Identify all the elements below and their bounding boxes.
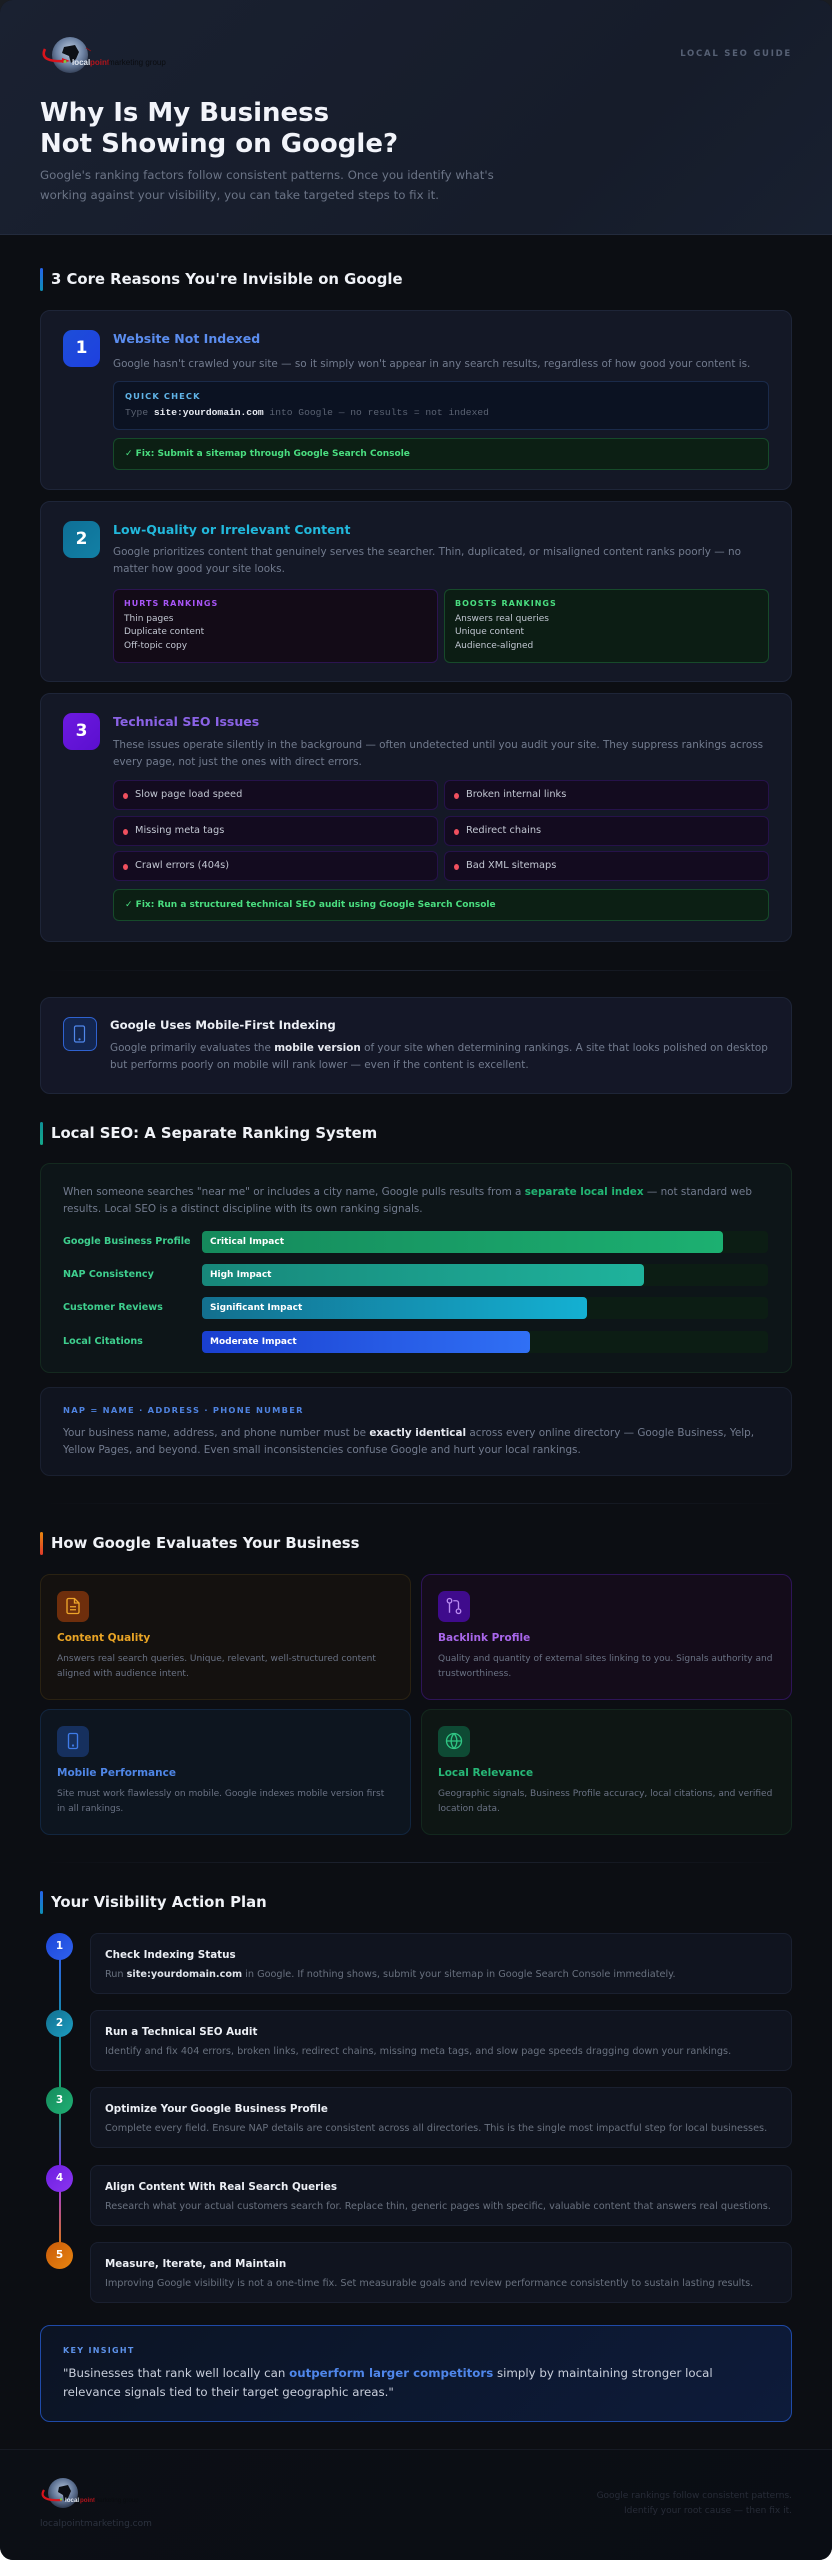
hurts item: Off-topic copy [124,641,187,651]
section heading: core reasons: 3 Core Reasons You're Invisible on Google [51,270,403,288]
step 5 text: Improving Google visibility is not a one-time fix. Set measurable goals and review performance consistently to sustain lasting results. [105,2278,753,2289]
issue: bad sitemaps: Bad XML sitemaps [466,860,556,871]
NAP text [63,1427,754,1456]
issue: crawl errors [113,851,438,881]
footer [0,2449,832,2560]
insight quote [63,2366,713,2399]
step 5 marker [46,2242,73,2269]
reason 2 description: matter how good your site looks. [113,563,285,575]
issue: bad sitemaps [444,851,769,881]
bar chart: local signals [63,1231,723,1353]
quick check text: Type site:yourdomain.com into Google — no results = not indexed [125,407,489,418]
footer logo: local [65,2497,79,2504]
boosts rankings [444,589,769,663]
section heading: action plan: Your Visibility Action Plan [51,1893,267,1911]
mobile performance text [57,1789,384,1814]
subtitle [40,168,494,202]
hurts item: Thin pages [124,614,173,624]
reason 1 description: Google hasn't crawled your site — so it simply won't appear in any search results, regardless of how good your content is. [113,358,750,370]
hurts rankings [113,589,438,663]
issue: slow page: Slow page load speed [135,789,242,800]
logo: point [90,58,110,67]
issue: meta tags [113,816,438,846]
badge 1: 1 [76,338,87,358]
backlink title: Backlink Profile [438,1632,530,1644]
bar: critical [202,1231,768,1253]
bar: moderate [202,1331,768,1353]
NAP text: Yellow Pages, and beyond. Even small inconsistencies confuse Google and hurt your local rankings. [63,1444,581,1456]
mobile text [110,1042,768,1071]
reason 2 description [113,546,741,575]
reason 3 description: These issues operate silently in the background — often undetected until you audit your site. They suppress rankings across [113,739,763,751]
badge 2: 2 [76,529,87,549]
hurts item: Duplicate content [124,627,204,637]
quick check box [113,381,769,430]
insight quote: "Businesses that rank well locally can outperform larger competitors simply by maintaining stronger local [63,2366,713,2380]
callout: key insight [40,2325,792,2422]
mobile title: Google Uses Mobile-First Indexing [110,1018,336,1032]
bar: high: High Impact [210,1270,271,1280]
badge 3 [63,713,100,750]
fix callout 3 [113,889,769,921]
local relevance text: Geographic signals, Business Profile accuracy, local citations, and verified [438,1789,772,1799]
step 2 card [90,2010,792,2071]
step 2 heading: Run a Technical SEO Audit [105,2026,257,2038]
step 1 marker [46,1933,73,1960]
step 2 text: Identify and fix 404 errors, broken links, redirect chains, missing meta tags, and slow page speeds dragging down your rankings. [105,2046,731,2057]
panel: content quality [40,1574,411,1700]
title: Not Showing on Google? [40,129,398,159]
subtitle: working against your visibility, you can take targeted steps to fix it. [40,188,439,202]
step 4 text: Research what your actual customers search for. Replace thin, generic pages with specific, valuable content that answers real questions. [105,2201,771,2212]
reason 1 title: Website Not Indexed [113,331,260,346]
footer logo: marketing group [94,2497,139,2504]
boosts item: Answers real queries [455,614,549,624]
panel: backlink profile [421,1574,792,1700]
row label: Local Citations [63,1336,143,1347]
icon: mobile [57,1726,89,1757]
footer logo [42,2478,139,2508]
panel: mobile-first [40,997,792,1094]
step 4 heading: Align Content With Real Search Queries [105,2181,337,2193]
step 2 marker: 2 [56,2017,63,2029]
icon: globe [438,1726,470,1757]
step 5 card [90,2242,792,2303]
panel: reason 2 [40,501,792,682]
fix callout 3: ✓ Fix: Run a structured technical SEO audit using Google Search Console [125,900,496,910]
content quality text [57,1654,376,1678]
logo: marketing group [108,58,166,67]
step 5 heading: Measure, Iterate, and Maintain [105,2258,286,2270]
bar: critical: Critical Impact [210,1237,284,1247]
content quality text: aligned with audience intent. [57,1668,189,1678]
reason 2 description: Google prioritizes content that genuinely serves the searcher. Thin, duplicated, or misaligned content ranks poorly — no [113,546,741,558]
issue: meta tags: Missing meta tags [135,825,224,836]
panel: NAP [40,1387,792,1476]
quick check label: QUICK CHECK [125,391,201,401]
issue: crawl errors: Crawl errors (404s) [135,860,229,871]
step 3 card [90,2087,792,2148]
step 2 marker [46,2010,73,2037]
panel: local relevance [421,1709,792,1835]
step 3 marker: 3 [56,2094,63,2106]
reason 3 description [113,739,763,768]
step 1 card [90,1933,792,1994]
NAP label: NAP = NAME · ADDRESS · PHONE NUMBER [63,1405,304,1415]
local intro text: results. Local SEO is a distinct discipline with its own ranking signals. [63,1203,423,1215]
insight label: KEY INSIGHT [63,2346,135,2355]
badge 1 [63,330,100,367]
fix callout 1: ✓ Fix: Submit a sitemap through Google Search Console [125,449,410,459]
fix callout 1 [113,438,769,470]
logo [42,37,166,73]
issue: slow page [113,780,438,810]
issue: redirect chains [444,816,769,846]
boosts item: Audience-aligned [455,641,533,651]
subtitle: Google's ranking factors follow consistent patterns. Once you identify what's [40,168,494,182]
footer tagline: Google rankings follow consistent patterns. [597,2491,792,2501]
bar: high [202,1264,768,1286]
icon: links [438,1591,470,1622]
footer url: localpointmarketing.com [40,2519,152,2529]
row label: Customer Reviews [63,1302,163,1313]
guide label: LOCAL SEO GUIDE [680,49,792,59]
content quality title: Content Quality [57,1632,150,1644]
section heading: evaluates: How Google Evaluates Your Business [51,1534,359,1552]
mobile text: but performs poorly on mobile will rank lower — even if the content is excellent. [110,1059,529,1071]
row label: Google Business Profile [63,1236,191,1247]
local relevance title: Local Relevance [438,1767,533,1779]
logo: local [72,58,90,67]
footer tagline [597,2491,792,2516]
header [0,0,832,235]
title [40,98,398,159]
panel: mobile performance [40,1709,411,1835]
timeline connectors [59,1960,61,2242]
reason 3 title: Technical SEO Issues [113,714,259,729]
mobile text: Google primarily evaluates the mobile version of your site when determining rankings. A site that looks polished on desktop [110,1042,768,1054]
step 4 card [90,2165,792,2226]
icon: document [57,1591,89,1622]
backlink text: trustworthiness. [438,1668,511,1678]
issue: broken links [444,780,769,810]
reason 3 description: every page, not just the ones with direct errors. [113,756,362,768]
hurts label: HURTS RANKINGS [124,599,218,608]
insight quote: relevance signals tied to their target geographic areas." [63,2385,394,2399]
bar: significant [202,1297,768,1319]
step 5 marker: 5 [56,2249,63,2261]
footer logo: point [80,2497,95,2504]
step 4 marker: 4 [56,2172,63,2184]
row label: NAP Consistency [63,1269,154,1280]
bar: moderate: Moderate Impact [210,1337,297,1347]
mobile performance title: Mobile Performance [57,1767,176,1779]
local intro text [63,1186,752,1215]
backlink text: Quality and quantity of external sites linking to you. Signals authority and [438,1654,772,1664]
panel: reason 1 [40,310,792,490]
local relevance text [438,1789,772,1814]
title: Why Is My Business [40,98,329,128]
boosts item: Unique content [455,627,524,637]
panel: local SEO [40,1163,792,1373]
step 4 marker [46,2165,73,2192]
backlink text [438,1654,772,1678]
badge 2 [63,521,100,558]
step 3 marker [46,2087,73,2114]
local intro text: When someone searches "near me" or includes a city name, Google pulls results from a separate local index — not standard web [63,1186,752,1198]
badge 3: 3 [76,721,87,741]
reason 2 title: Low-Quality or Irrelevant Content [113,522,350,537]
step 3 text: Complete every field. Ensure NAP details are consistent across all directories. This is the single most impactful step for local businesses. [105,2123,767,2134]
content quality text: Answers real search queries. Unique, relevant, well-structured content [57,1654,376,1664]
step 1 heading: Check Indexing Status [105,1949,236,1961]
mobile performance text: in all rankings. [57,1804,123,1814]
local relevance text: location data. [438,1804,500,1814]
issue: broken links: Broken internal links [466,789,566,800]
icon: phone [63,1017,97,1051]
mobile performance text: Site must work flawlessly on mobile. Google indexes mobile version first [57,1789,384,1799]
issue: redirect chains: Redirect chains [466,825,541,836]
panel: reason 3 [40,693,792,942]
step 1 text: Run site:yourdomain.com in Google. If nothing shows, submit your sitemap in Google Search Console immediately. [105,1969,676,1980]
bar: significant: Significant Impact [210,1303,302,1313]
NAP text: Your business name, address, and phone number must be exactly identical across every online directory — Google Business, Yelp, [63,1427,754,1439]
boosts label: BOOSTS RANKINGS [455,599,557,608]
step 3 heading: Optimize Your Google Business Profile [105,2103,328,2115]
section heading: local SEO: Local SEO: A Separate Ranking System [51,1124,377,1142]
footer tagline: Identify your root cause — then fix it. [624,2506,792,2516]
step 1 marker: 1 [56,1940,63,1952]
